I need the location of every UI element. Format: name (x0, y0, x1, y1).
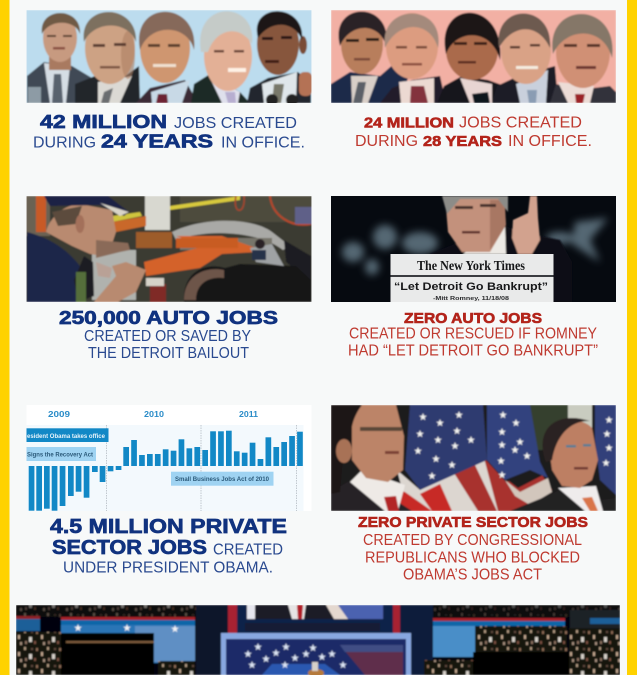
headline: zero auto jobs: ZERO AUTO JOBS (404, 311, 542, 327)
right yellow border (627, 0, 637, 675)
newspaper headline box (390, 254, 554, 302)
headline: 24 million jobs: DURING (355, 133, 418, 150)
callout: Obama takes office: esident Obama takes office (27, 433, 105, 440)
photo: auto worker on the assembly line (26, 196, 312, 302)
headline: zero auto jobs: CREATED OR RESCUED IF ROMNEY (349, 326, 597, 342)
star fields (405, 405, 487, 490)
photo: five Democratic presidents (26, 10, 312, 106)
headline: 42 million jobs: JOBS CREATED (174, 115, 297, 132)
left video banner (61, 617, 195, 675)
chart: monthly private sector jobs (26, 405, 312, 511)
job bars (29, 431, 303, 511)
headline: 42 million jobs: 42 MILLION (40, 112, 167, 132)
year labels: 2010 (144, 410, 165, 419)
callout: Recovery Act: Signs the Recovery Act (27, 452, 94, 458)
headline: 4.5 million private sector jobs: CREATED (213, 542, 283, 558)
headline: 24 million jobs: JOBS CREATED (459, 114, 582, 132)
headline: 4.5 million private sector jobs: SECTOR JOBS (52, 537, 207, 559)
headline: zero private sector jobs: OBAMA’S JOBS ACT (403, 566, 542, 584)
right video banner (424, 618, 569, 675)
photo: Cantor and Boehner before flags (331, 405, 616, 511)
headline: zero private sector jobs (358, 515, 588, 584)
left yellow border (0, 0, 10, 675)
headline: 24 million jobs: 24 MILLION (364, 116, 454, 132)
year labels (48, 411, 258, 417)
callout: Obama takes office (26, 428, 108, 442)
stripes, second flag (484, 458, 552, 511)
headline: 42 million jobs: DURING (33, 134, 96, 152)
stage screen (221, 633, 411, 675)
headline: 250,000 auto jobs: THE DETROIT BAILOUT (88, 345, 249, 362)
headline: 42 million jobs: 24 YEARS (101, 132, 213, 152)
photo: five Republican presidents (331, 10, 616, 103)
headline: 42 million jobs (33, 112, 305, 152)
stripes, left flag (397, 458, 500, 511)
callout: Small Business Jobs Act (171, 472, 274, 486)
headline: zero auto jobs: HAD “LET DETROIT GO BANKRUPT” (348, 342, 598, 360)
headline: 24 million jobs (355, 114, 592, 150)
headline: 24 million jobs: 28 YEARS (423, 134, 502, 150)
newspaper headline box: “Let Detroit Go Bankrupt” (394, 281, 548, 293)
headline: 4.5 million private sector jobs: UNDER PRESIDENT OBAMA. (63, 560, 273, 576)
headline: 24 million jobs: IN OFFICE. (508, 133, 592, 150)
headline: 250,000 auto jobs: 250,000 AUTO JOBS (59, 308, 278, 328)
headline: zero private sector jobs: CREATED BY CONGRESSIONAL (363, 532, 582, 549)
photo: convention stage (16, 605, 620, 675)
headline: zero private sector jobs: REPUBLICANS WHO BLOCKED (365, 550, 580, 566)
headline: 4.5 million private sector jobs: 4.5 MILLION PRIVATE (50, 516, 287, 538)
newspaper headline box: The New York Times (417, 259, 525, 274)
callout: Recovery Act (26, 447, 96, 461)
photo: Romney with New York Times headline (331, 196, 616, 302)
headline: zero auto jobs (348, 311, 598, 360)
callout: Small Business Jobs Act: Small Business Jobs Act of 2010 (175, 476, 269, 483)
headline: 250,000 auto jobs (59, 308, 278, 362)
headline: zero private sector jobs: ZERO PRIVATE SECTOR JOBS (358, 515, 588, 531)
year labels: 2009 (48, 410, 71, 419)
headline: 250,000 auto jobs: CREATED OR SAVED BY (84, 328, 251, 345)
headline: 4.5 million private sector jobs (50, 516, 287, 576)
year labels: 2011 (239, 410, 259, 419)
headline: 42 million jobs: IN OFFICE. (221, 134, 305, 152)
newspaper headline box: -Mitt Romney, 11/18/08 (433, 296, 509, 302)
